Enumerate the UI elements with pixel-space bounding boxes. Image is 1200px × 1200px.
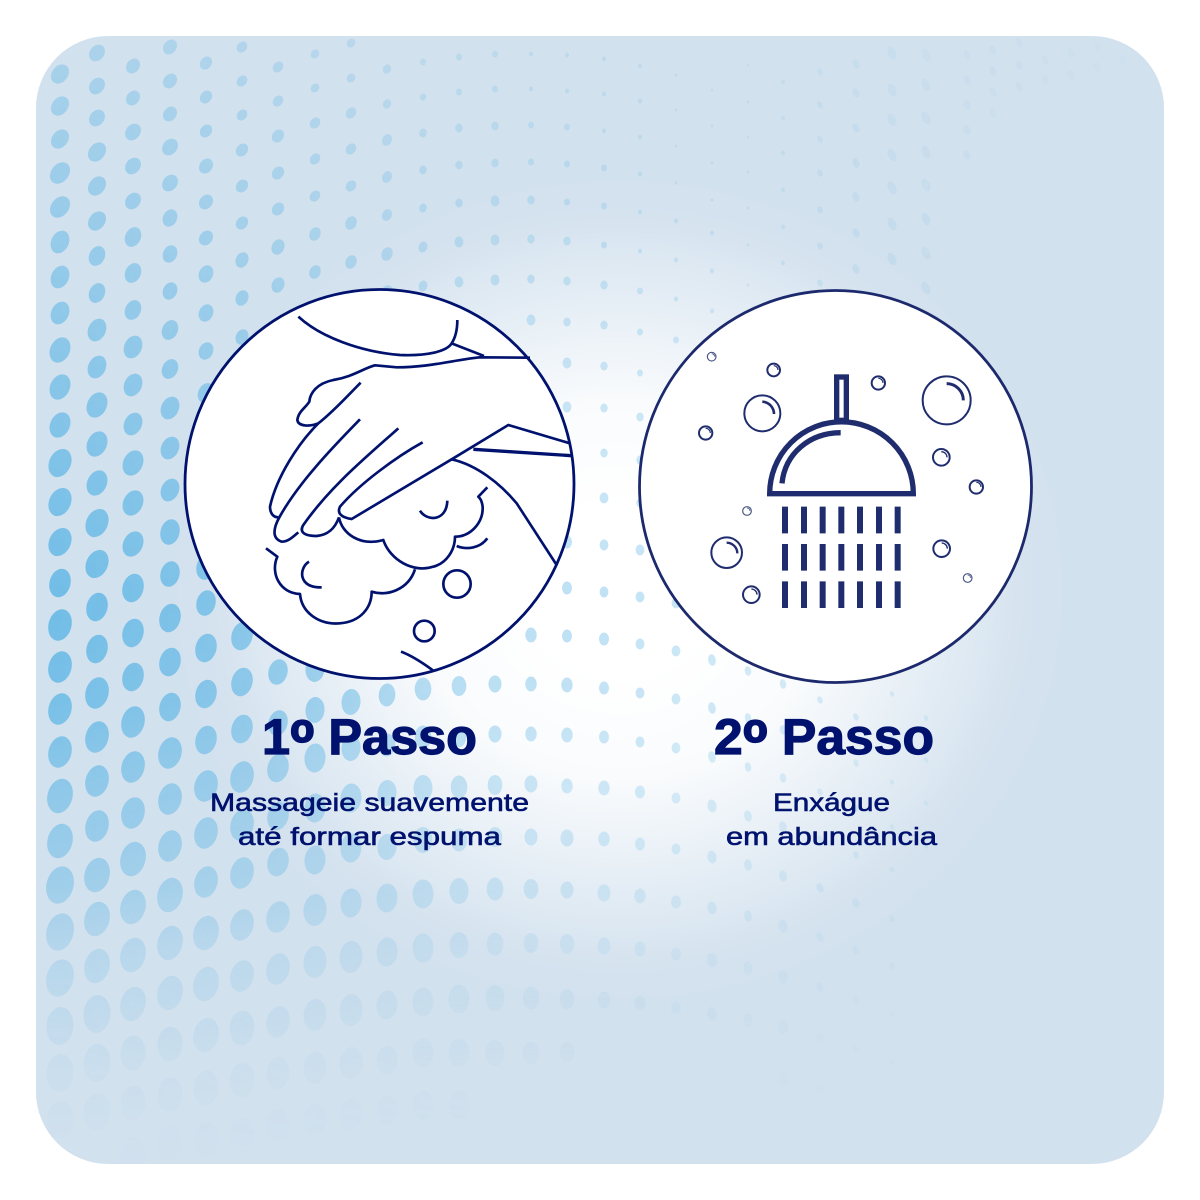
icon: shower dome xyxy=(770,422,913,494)
text: step 1 description xyxy=(210,789,529,851)
panel: step 2 circle with shower illustration xyxy=(640,290,1032,682)
panel: step 1 circle with hand illustration xyxy=(185,290,574,678)
text: step 1 description: Massageie suavemente xyxy=(210,789,529,817)
heading: 2º Passo: º xyxy=(743,706,768,780)
text: step 2 description xyxy=(726,789,937,851)
text: step 1 description: até formar espuma xyxy=(238,823,501,851)
heading: 1º Passo: º xyxy=(290,706,314,780)
heading: 2º Passo: Passo xyxy=(768,709,934,765)
icon: shower pipe xyxy=(837,377,846,420)
icon: water drops xyxy=(785,507,898,608)
heading: 1º Passo: Passo xyxy=(314,709,477,765)
circle: step 2 background xyxy=(640,290,1032,682)
heading: 2º Passo: 2 xyxy=(714,709,742,765)
text: step 2 description: em abundância xyxy=(726,823,937,851)
icon: hands massaging foam xyxy=(266,317,572,671)
icon: shower head with water and bubbles xyxy=(699,352,983,608)
circle: step 1 background xyxy=(185,290,574,678)
icon: dome highlight xyxy=(782,433,841,483)
heading: 1º Passo: 1 xyxy=(262,709,290,765)
text: step 2 description: Enxágue xyxy=(773,789,890,817)
icon: bubbles xyxy=(699,352,983,603)
